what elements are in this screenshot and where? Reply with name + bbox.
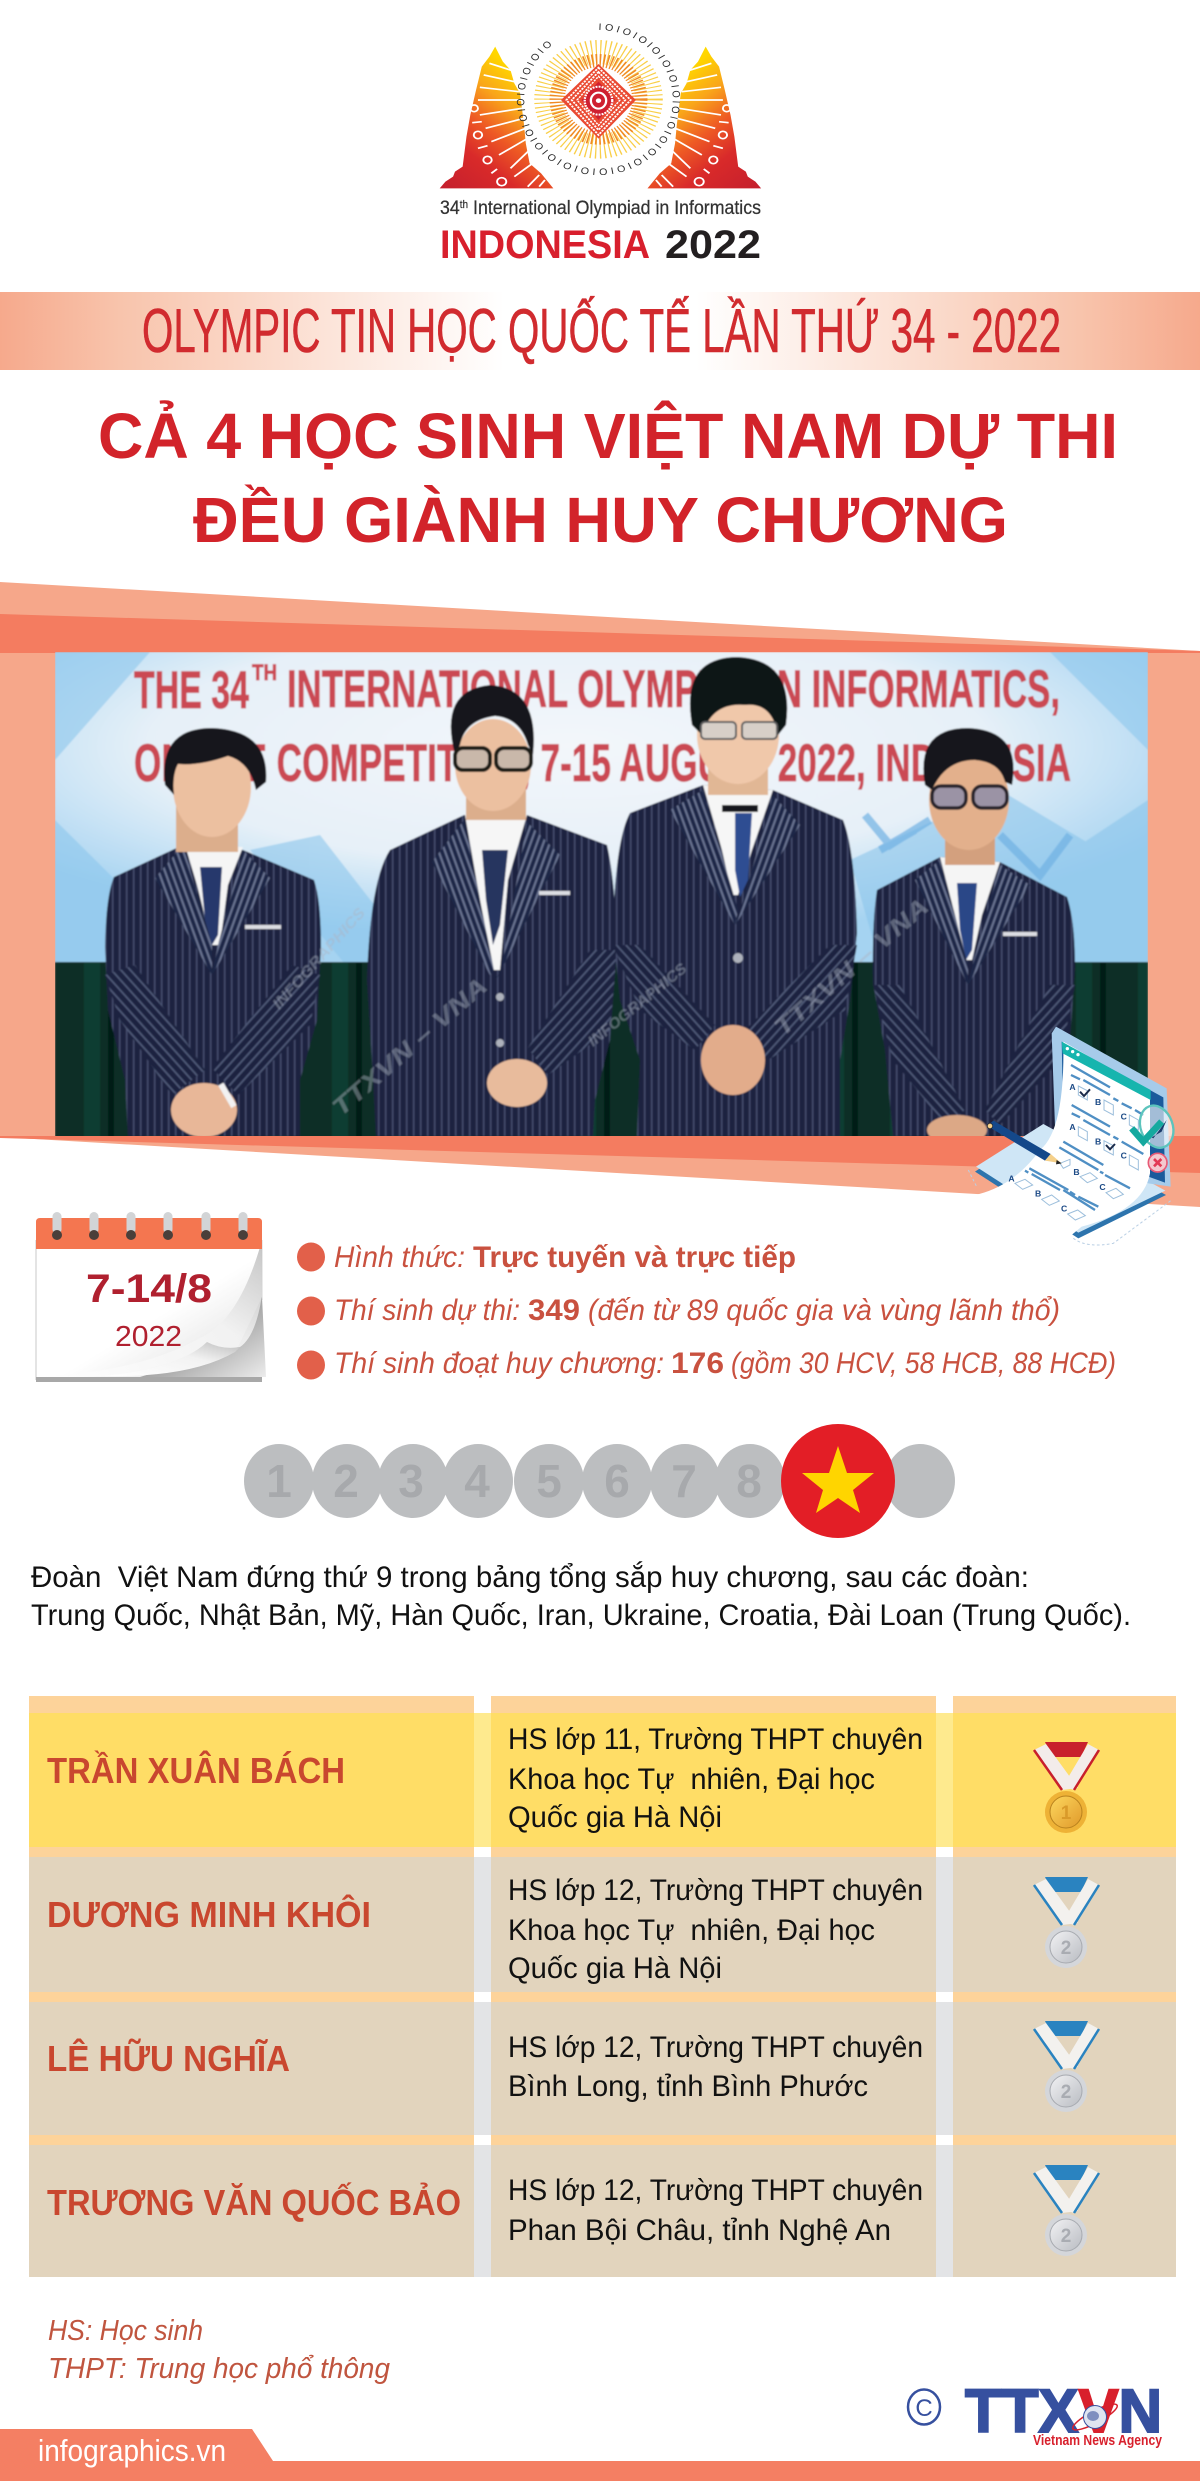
photo: four students — [55, 652, 1148, 1145]
icon: gold medal — [1034, 1742, 1099, 1833]
calendar year: 2022 — [115, 1321, 182, 1353]
laptop screen — [1052, 1027, 1171, 1187]
logo caption: th — [460, 199, 468, 211]
pencil — [987, 1121, 1062, 1164]
icon: silver medal: 2 — [1061, 2226, 1071, 2247]
row 3: Lê Hữu Nghĩa — [47, 2021, 1099, 2112]
answer letters: A — [1069, 1082, 1076, 1092]
Vietnam flag circle — [781, 1424, 895, 1538]
sun rays — [548, 52, 649, 147]
info: contestants: (đến từ 89 quốc gia và vùng lãnh thổ) — [588, 1294, 1060, 1327]
info: medal winners: Thí sinh đoạt huy chương: — [334, 1347, 664, 1380]
row 4: Trương Văn Quốc Bảo: HS lớp 12, Trường THPT chuyên — [508, 2174, 923, 2207]
answer letters: B — [1095, 1097, 1101, 1107]
agency caption: Vietnam News Agency — [1033, 2433, 1162, 2449]
calendar page — [36, 1240, 262, 1377]
table row backgrounds — [29, 1696, 1176, 2277]
info: contestants — [297, 1294, 1060, 1327]
answer letters: C — [1121, 1111, 1128, 1121]
rank numbers: 7 — [671, 1455, 697, 1507]
calendar date: 7-14/8 — [86, 1267, 212, 1311]
icon: gold medal: 1 — [1061, 1803, 1072, 1824]
photo frame ribbons — [0, 582, 1200, 1207]
answer letters — [1008, 1082, 1128, 1214]
row 2: Dương Minh Khôi: Quốc gia Hà Nội — [508, 1952, 722, 1985]
footnotes: THPT: Trung học phổ thông — [48, 2353, 390, 2385]
calendar header — [36, 1218, 262, 1249]
red cross badge — [1148, 1153, 1167, 1172]
temple left — [440, 47, 553, 188]
student 3 — [613, 657, 857, 1136]
watermarks on photo — [269, 893, 934, 1122]
info: medal winners: 176 — [671, 1347, 724, 1380]
logo caption: 34 — [440, 197, 462, 219]
icon: silver medal — [1034, 2165, 1099, 2256]
rank numbers: 2 — [333, 1455, 359, 1507]
ranking paragraph — [31, 1561, 1131, 1632]
answer letters: C — [1061, 1204, 1068, 1214]
answer letters: B — [1073, 1167, 1080, 1177]
watermarks on photo: TTXVN – VNA — [769, 893, 934, 1042]
laptop base — [975, 1126, 1166, 1238]
watermarks on photo: INFOGRAPHICS — [269, 905, 369, 1013]
icon: silver medal — [1034, 1877, 1099, 1968]
info: medal winners: (gồm 30 HCV, 58 HCB, 88 HCĐ) — [731, 1347, 1116, 1380]
question lines — [1025, 1065, 1143, 1210]
main title: CẢ 4 HỌC SINH VIỆT NAM DỰ THI — [98, 399, 1118, 472]
rank numbers: 4 — [464, 1455, 490, 1507]
rank numbers: 1 — [266, 1455, 292, 1507]
rank numbers — [266, 1455, 762, 1507]
row 3: Lê Hữu Nghĩa: Bình Long, tỉnh Bình Phước — [508, 2070, 868, 2103]
icon: silver medal: 2 — [1061, 2082, 1071, 2103]
row 4: Trương Văn Quốc Bảo: TRƯƠNG VĂN QUỐC BẢO — [47, 2181, 461, 2223]
curtain — [55, 962, 1148, 1138]
paper — [965, 1042, 1150, 1251]
info: format — [297, 1241, 796, 1274]
check boxes — [1015, 1086, 1138, 1220]
info: format: Trực tuyến và trực tiếp — [473, 1241, 796, 1274]
logo 2022: 2022 — [665, 223, 761, 267]
central diamond — [561, 64, 636, 139]
logo caption: International Olympiad in Informatics — [468, 197, 761, 219]
row 3: Lê Hữu Nghĩa: LÊ HỮU NGHĨA — [47, 2037, 290, 2079]
tick marks — [1080, 1089, 1115, 1149]
row 2: Dương Minh Khôi: HS lớp 12, Trường THPT chuyên — [508, 1874, 923, 1907]
row 3: Lê Hữu Nghĩa: HS lớp 12, Trường THPT chuyên — [508, 2031, 923, 2064]
ranking paragraph: Đoàn Việt Nam đứng thứ 9 trong bảng tổng sắp huy chương, sau các đoàn: — [31, 1561, 1029, 1594]
row 1: Trần Xuân Bách: Khoa học Tự nhiên, Đại học — [508, 1763, 875, 1796]
TTXVN logo — [908, 2377, 1162, 2449]
info: contestants: 349 — [528, 1294, 580, 1327]
row 1: Trần Xuân Bách: HS lớp 11, Trường THPT chuyên — [508, 1723, 923, 1756]
footer bar: infographics.vn — [38, 2433, 226, 2468]
footer bar — [0, 2429, 1200, 2481]
info: medal winners — [297, 1347, 1116, 1380]
row 2: Dương Minh Khôi: DƯƠNG MINH KHÔI — [47, 1893, 371, 1935]
dashed outline — [968, 1170, 1172, 1245]
green check badge — [1132, 1101, 1179, 1152]
banner text: THE 34 — [134, 661, 249, 720]
answer letters: B — [1095, 1136, 1101, 1146]
watermarks on photo: INFOGRAPHICS — [585, 960, 690, 1050]
table: medalists — [29, 1696, 1176, 2277]
banner text — [134, 660, 1071, 793]
page curl — [36, 1240, 266, 1378]
answer letters: B — [1035, 1189, 1041, 1199]
backdrop banner — [55, 652, 1148, 964]
student 1 — [105, 728, 321, 1137]
icon: silver medal — [1034, 2021, 1099, 2112]
row 1: Trần Xuân Bách — [47, 1723, 1099, 1834]
row 1: Trần Xuân Bách: TRẦN XUÂN BÁCH — [47, 1749, 345, 1791]
info: contestants: Thí sinh dự thi: — [334, 1294, 520, 1327]
rank numbers: 3 — [398, 1455, 424, 1507]
temple right — [647, 47, 761, 188]
rank numbers: 8 — [736, 1455, 762, 1507]
row 1: Trần Xuân Bách: Quốc gia Hà Nội — [508, 1801, 722, 1834]
TTXVN wordmark: TTXVN — [965, 2377, 1162, 2445]
answer letters: C — [1121, 1150, 1128, 1160]
icon: online test on laptop — [965, 1027, 1179, 1251]
row 2: Dương Minh Khôi — [47, 1874, 1099, 1985]
row 4: Trương Văn Quốc Bảo: Phan Bội Châu, tỉnh Nghệ An — [508, 2214, 891, 2247]
banner text: TH — [252, 660, 277, 685]
info: format: Hình thức: — [334, 1241, 465, 1274]
binary ring: IOIOIOIOIOIOIOIOIOIOIOIOIOIOIOIOIOIOIOIOIOIOIOIOIO — [516, 24, 680, 175]
info list — [297, 1241, 1116, 1380]
ranking paragraph: Trung Quốc, Nhật Bản, Mỹ, Hàn Quốc, Iran, Ukraine, Croatia, Đài Loan (Trung Quốc). — [31, 1599, 1131, 1632]
answer letters: A — [1069, 1122, 1076, 1132]
icon: silver medal: 2 — [1061, 1938, 1071, 1959]
globe emblem — [1070, 2400, 1120, 2434]
row 4: Trương Văn Quốc Bảo — [47, 2165, 1099, 2256]
answer letters: C — [1099, 1182, 1106, 1192]
calendar rings — [52, 1212, 248, 1240]
main title: ĐỀU GIÀNH HUY CHƯƠNG — [193, 484, 1008, 556]
logo: 34th International Olympiad in Informatics — [440, 24, 762, 267]
student 2 — [367, 685, 617, 1136]
logo INDONESIA: INDONESIA — [440, 223, 650, 267]
calendar: 7-14/8 2022 — [36, 1212, 266, 1382]
rank numbers: 5 — [536, 1455, 562, 1507]
watermarks on photo: TTXVN – VNA — [327, 973, 493, 1122]
main title — [98, 399, 1118, 556]
logo emblem — [440, 24, 762, 188]
ranking circles — [244, 1424, 955, 1538]
answer letters: A — [1008, 1174, 1015, 1184]
row 2: Dương Minh Khôi: Khoa học Tự nhiên, Đại học — [508, 1914, 875, 1947]
footnotes: HS: Học sinh — [48, 2315, 203, 2347]
copyright sign — [908, 2390, 940, 2424]
student 4 — [873, 728, 1075, 1145]
footnotes — [48, 2315, 390, 2385]
rank numbers: 6 — [604, 1455, 630, 1507]
copyright sign: C — [915, 2395, 933, 2422]
